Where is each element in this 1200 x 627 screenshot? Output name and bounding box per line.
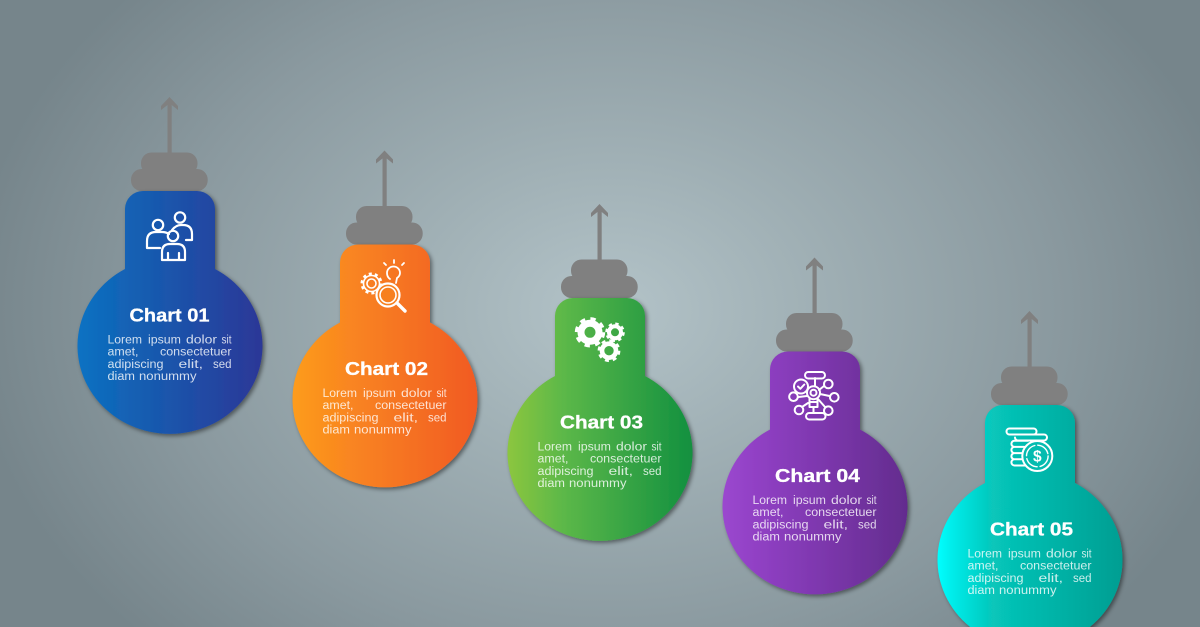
text block: consectetuer xyxy=(375,400,447,412)
bulb cap xyxy=(776,313,853,352)
text block: diam xyxy=(752,532,780,544)
heading: Chart 04 xyxy=(775,465,861,486)
text block: diam xyxy=(538,478,565,490)
text block: consectetuer xyxy=(590,454,662,466)
bulb body xyxy=(292,244,478,487)
text block: diam xyxy=(108,371,135,383)
text block: nonummy xyxy=(354,424,412,436)
bulb cap xyxy=(561,260,638,298)
text block: ipsum xyxy=(148,334,181,346)
text block: ipsum xyxy=(1008,548,1041,560)
text block: Lorem xyxy=(538,442,572,454)
text block: ipsum xyxy=(363,388,396,400)
bulb cap xyxy=(346,206,423,244)
arrow xyxy=(161,97,178,155)
text block: dolor xyxy=(1046,548,1077,560)
bulb body xyxy=(508,298,692,541)
text block: amet, xyxy=(538,454,568,466)
text block: amet, xyxy=(752,507,784,519)
bulb body xyxy=(722,352,908,594)
arrow xyxy=(376,150,393,208)
text block: elit, xyxy=(394,412,418,424)
text block: sed xyxy=(213,359,232,371)
text block: sit xyxy=(222,334,232,346)
text block: sed xyxy=(643,466,662,478)
text block: consectetuer xyxy=(160,346,232,358)
text block: consectetuer xyxy=(805,507,877,519)
text block: dolor xyxy=(616,442,647,454)
text block: diam xyxy=(968,585,995,597)
text block: adipiscing xyxy=(108,359,164,371)
panel: Chart 01 bulb xyxy=(78,97,262,434)
icon: gears xyxy=(577,319,623,361)
text block xyxy=(968,548,1092,597)
text block: Lorem xyxy=(108,334,142,346)
bulb body xyxy=(78,191,262,434)
icon: coins xyxy=(1006,428,1052,471)
icon: idea network xyxy=(789,372,839,420)
icon: gear, bulb and magnifier xyxy=(362,260,405,311)
text block: dolor xyxy=(401,388,432,400)
text block: consectetuer xyxy=(1020,560,1092,572)
text block: sed xyxy=(858,520,876,532)
heading: Chart 01 xyxy=(130,304,210,326)
icon: people xyxy=(147,212,192,260)
text block: amet, xyxy=(108,346,138,358)
text block: elit, xyxy=(824,520,848,532)
panel: Chart 04 bulb xyxy=(722,258,908,594)
bulb body xyxy=(938,405,1122,627)
text block xyxy=(108,334,232,383)
text block: Lorem xyxy=(968,548,1002,560)
text block: nonummy xyxy=(569,478,627,490)
text block: sed xyxy=(1073,573,1092,585)
text block: Lorem xyxy=(322,388,357,400)
text block xyxy=(538,442,662,490)
text block: elit, xyxy=(1038,573,1063,585)
text block: sit xyxy=(1082,548,1092,560)
bulb cap xyxy=(991,366,1068,405)
text block: adipiscing xyxy=(752,520,808,532)
text block: dolor xyxy=(831,495,862,507)
text block: sed xyxy=(428,412,446,424)
text block xyxy=(752,495,877,544)
heading: Chart 02 xyxy=(345,358,428,379)
heading: Chart 05 xyxy=(990,518,1073,540)
text block: elit, xyxy=(178,359,203,371)
panel: Chart 05 bulb xyxy=(938,311,1122,627)
arrow xyxy=(591,204,608,262)
panel: Chart 03 bulb xyxy=(508,204,692,541)
text block: ipsum xyxy=(578,442,611,454)
text block: nonummy xyxy=(139,371,197,383)
text block: sit xyxy=(866,495,877,507)
text block: sit xyxy=(436,388,447,400)
text block: amet, xyxy=(968,560,998,572)
arrow xyxy=(806,258,823,316)
bulb cap xyxy=(131,152,208,191)
panel: Chart 02 bulb xyxy=(292,150,478,487)
text block xyxy=(322,388,447,436)
text block: elit, xyxy=(608,466,633,478)
text block: sit xyxy=(652,442,662,454)
text block: diam xyxy=(322,424,350,436)
icon: coins: $ xyxy=(1033,448,1042,466)
text block: adipiscing xyxy=(538,466,594,478)
text block: dolor xyxy=(186,334,217,346)
text block: adipiscing xyxy=(968,573,1024,585)
text block: Lorem xyxy=(752,495,787,507)
text block: adipiscing xyxy=(322,412,378,424)
text block: nonummy xyxy=(784,532,842,544)
text block: amet, xyxy=(322,400,354,412)
text block: ipsum xyxy=(793,495,826,507)
text block: nonummy xyxy=(999,585,1057,597)
arrow xyxy=(1021,311,1038,369)
heading: Chart 03 xyxy=(560,412,643,432)
